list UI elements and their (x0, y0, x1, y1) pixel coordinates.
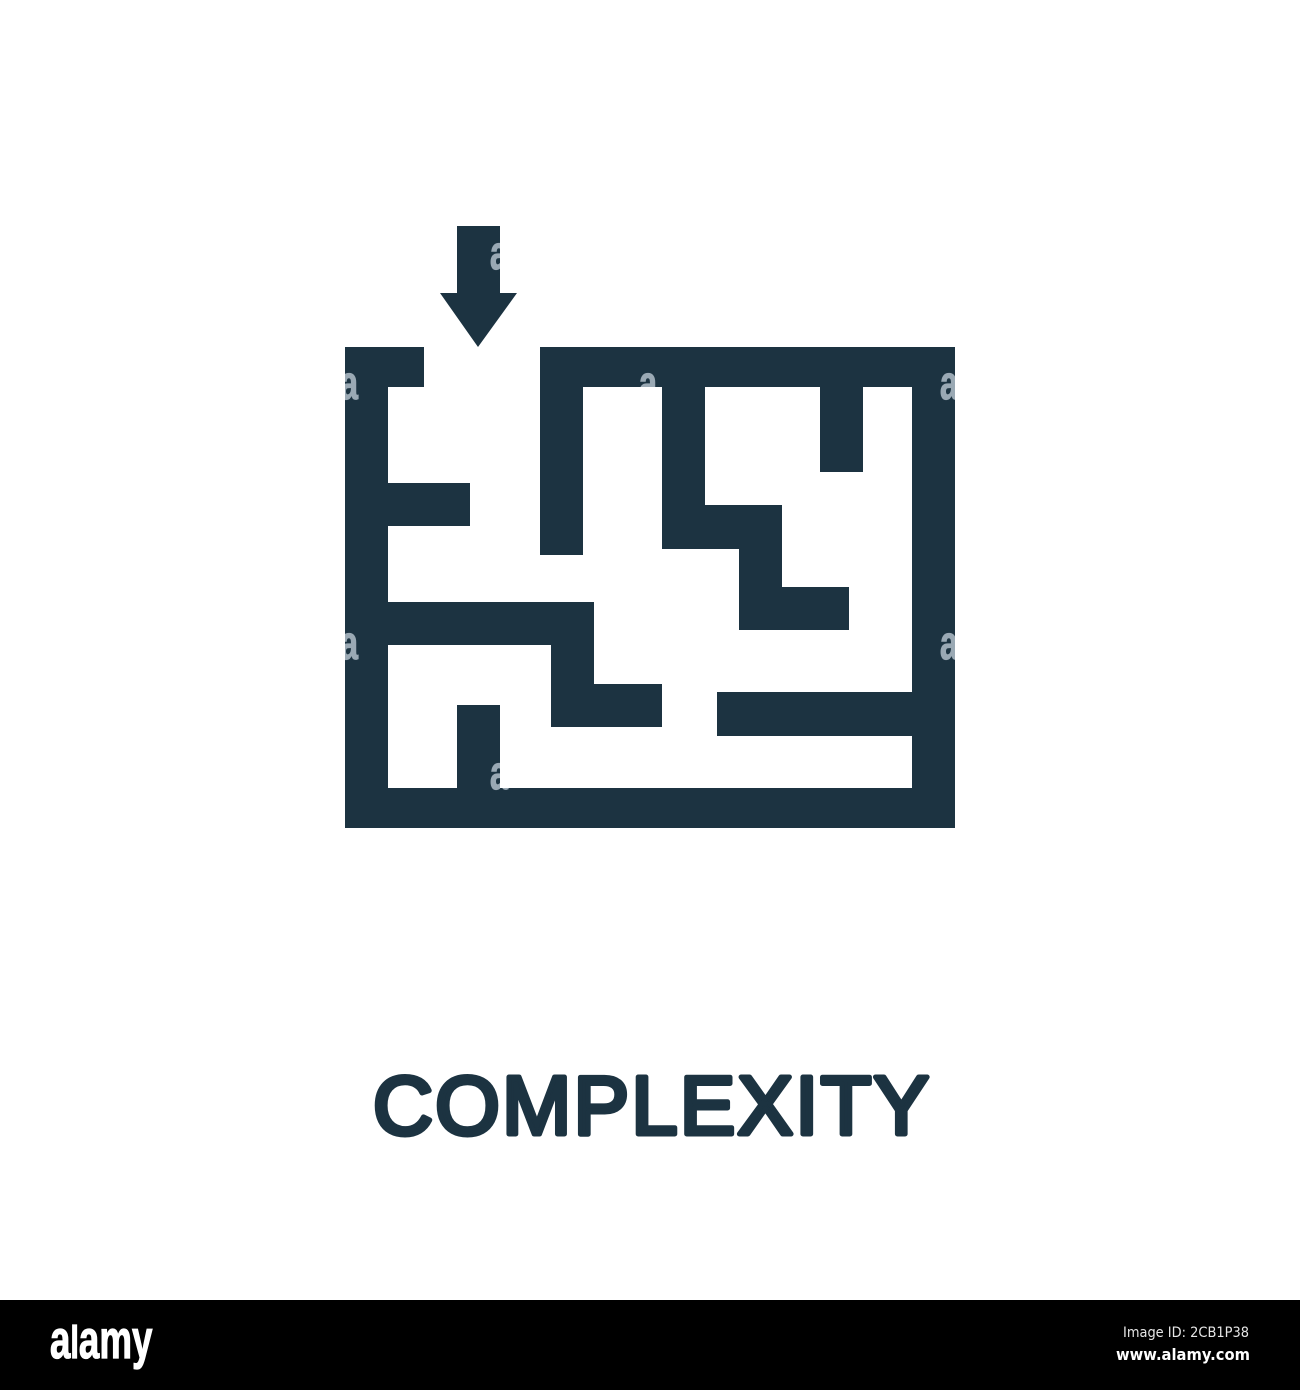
footer bar (0, 1300, 1300, 1390)
watermark glyphs on the icon: a (490, 226, 509, 279)
watermark glyphs on the icon: a (940, 356, 959, 409)
title: COMPLEXITY: COMPLEXITY (373, 1059, 929, 1152)
icon: down arrow (440, 226, 517, 347)
watermark glyphs on the icon: a (490, 746, 509, 799)
watermark glyphs on the icon: a (340, 616, 359, 669)
watermark glyphs on the icon (340, 226, 959, 799)
website: www.alamy.com (1116, 1345, 1250, 1364)
watermark glyphs on the icon: a (340, 356, 359, 409)
icon: maze with entry arrow (340, 226, 959, 828)
maze walls (345, 347, 955, 828)
image id: Image ID: 2CB1P38 (1123, 1325, 1249, 1341)
logo: alamy: alamy (50, 1309, 153, 1370)
watermark glyphs on the icon: a (639, 356, 658, 409)
watermark glyphs on the icon: a (940, 616, 959, 669)
